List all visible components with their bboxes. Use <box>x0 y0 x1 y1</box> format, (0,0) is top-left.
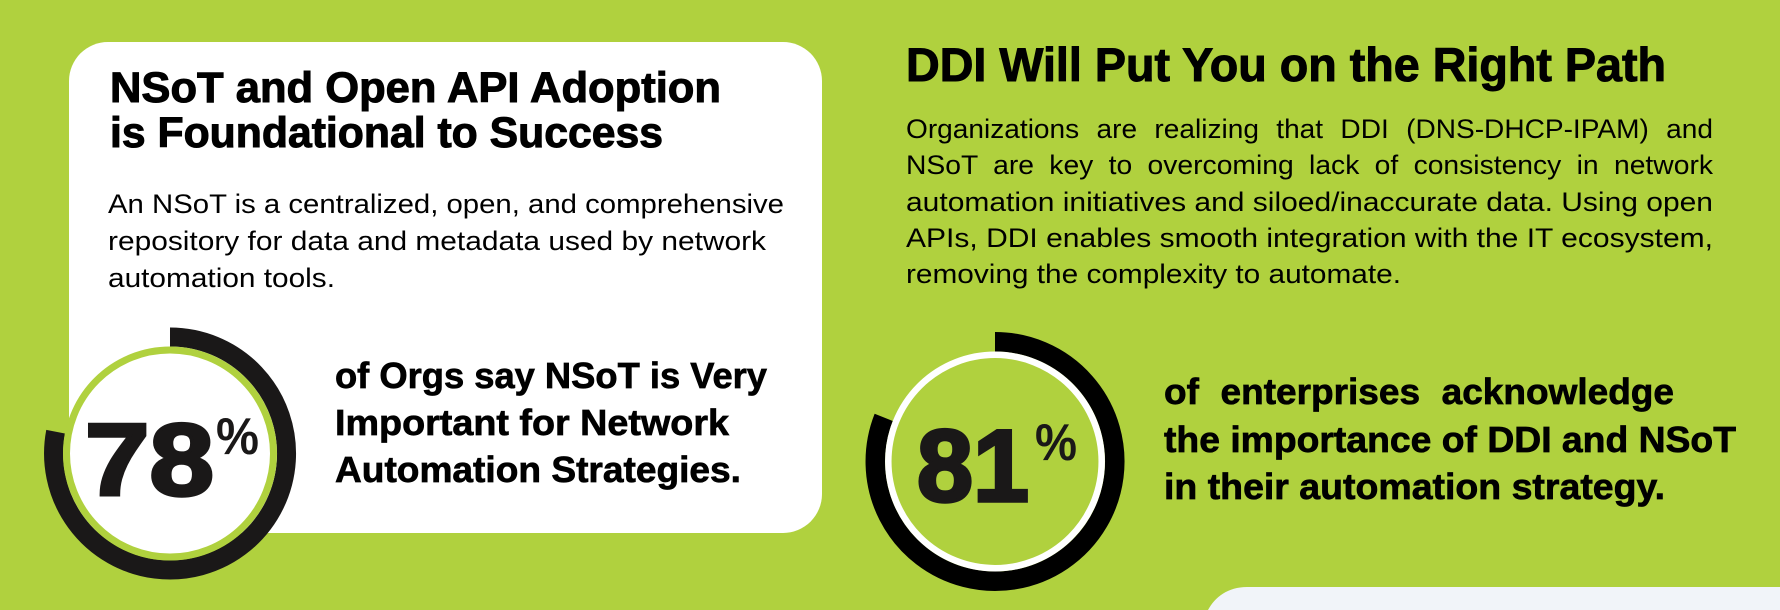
chart: 78 percent donut <box>54 337 287 570</box>
panel: NSoT and Open API adoption <box>54 42 822 570</box>
text block: DDI explanation: NSoT are key to overcoming lack of consistency in network <box>906 150 1714 180</box>
stat text: 81 percent description: of enterprises acknowledge <box>1164 371 1674 412</box>
text block: DDI explanation: automation initiatives and siloed/inaccurate data. Using open <box>906 187 1713 217</box>
heading: NSoT and Open API Adoption: is Foundational to Success <box>110 109 663 157</box>
value 81 percent: % <box>1035 414 1077 472</box>
stat text: 78 percent description <box>335 355 767 490</box>
inner ring <box>888 355 1102 568</box>
value 81 percent: 81 <box>917 409 1029 523</box>
chart: 81 percent donut <box>875 342 1115 581</box>
stat text: 78 percent description: of Orgs say NSoT is Very <box>335 355 767 396</box>
stat text: 81 percent description: the importance of DDI and NSoT <box>1164 419 1736 460</box>
heading: NSoT and Open API Adoption <box>110 64 721 157</box>
stat text: 78 percent description: Important for Network <box>335 402 730 443</box>
stat text: 81 percent description <box>1164 371 1736 507</box>
stat text: 78 percent description: Automation Strategies. <box>335 449 741 490</box>
text block: DDI explanation: APIs, DDI enables smooth integration with the IT ecosystem, <box>906 223 1713 253</box>
heading: NSoT and Open API Adoption: NSoT and Open API Adoption <box>110 64 721 112</box>
panel background <box>69 42 822 533</box>
text block: NSoT definition: An NSoT is a centralized, open, and comprehensive <box>108 189 784 219</box>
value 78 percent: 78 <box>85 403 214 517</box>
text block: NSoT definition <box>108 189 784 293</box>
text block: NSoT definition: repository for data and metadata used by network <box>108 226 767 256</box>
value 78 percent <box>85 403 259 517</box>
text block: DDI explanation: removing the complexity to automate. <box>906 259 1401 289</box>
donut arc 81 percent <box>875 342 1115 581</box>
stat text: 81 percent description: in their automation strategy. <box>1164 466 1665 507</box>
next panel top edge <box>1208 587 1780 610</box>
donut arc 78 percent <box>54 337 287 570</box>
text block: DDI explanation: Organizations are realizing that DDI (DNS-DHCP-IPAM) and <box>906 114 1713 144</box>
text block: DDI explanation <box>906 114 1714 289</box>
value 78 percent: % <box>216 408 259 466</box>
heading: DDI Will Put You on the Right Path: DDI Will Put You on the Right Path <box>906 38 1666 91</box>
inner ring <box>66 350 274 557</box>
text block: NSoT definition: automation tools. <box>108 263 335 293</box>
